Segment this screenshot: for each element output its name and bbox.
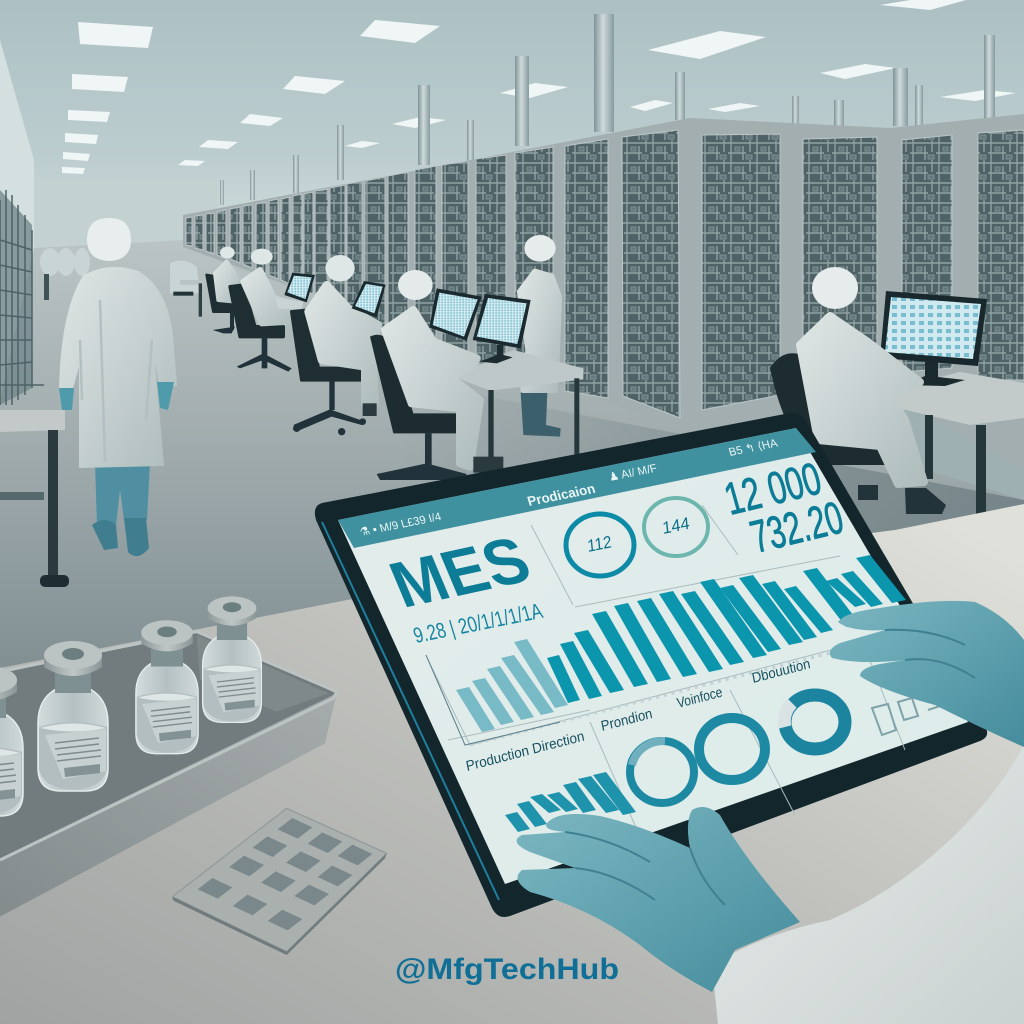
monitor and worker 5 <box>230 249 315 372</box>
desk with two monitors <box>429 288 583 473</box>
lab coat sleeve <box>712 745 1024 1024</box>
label: Dbouution: Dbouution <box>751 656 812 687</box>
header bar: B5 ↰ ⟨HA <box>727 438 780 459</box>
label: Production Direction: Production Direction <box>465 729 586 775</box>
header bar: ⚗ ▪ M/9 L£39 I/4 <box>358 511 443 539</box>
tablet body <box>315 413 987 917</box>
legs <box>95 462 150 525</box>
date text: 9.28 | 20/1/1/1/1A <box>410 598 546 648</box>
walking worker <box>59 218 176 556</box>
gloves <box>59 382 174 410</box>
floor shading right <box>400 380 1024 640</box>
right gloved hand <box>830 601 1024 747</box>
seated workers and desks, coordinates in crop space <box>170 235 583 480</box>
chair and worker 2 <box>370 270 503 480</box>
device icons panel <box>872 692 940 735</box>
back wall <box>33 180 218 250</box>
rack glass panels <box>186 130 1024 418</box>
chart tick row <box>470 648 850 745</box>
MES title: MES <box>380 523 541 621</box>
blister pack <box>172 808 387 955</box>
monitor and worker 4 <box>292 255 386 435</box>
watermark handle: @MfgTechHub <box>395 953 619 986</box>
header bar: ♟ AI/ M/F <box>607 463 659 484</box>
foreground table <box>0 504 1024 1024</box>
donut A <box>630 741 694 803</box>
label: Voinfoce: Voinfoce <box>676 685 724 712</box>
main bar chart <box>547 555 906 703</box>
monitor <box>880 291 987 366</box>
chair and worker 6 <box>207 247 237 333</box>
vial 3 <box>136 620 198 754</box>
header labels: Prodicaion <box>526 481 597 509</box>
vial 4 <box>203 596 261 722</box>
vial 1 <box>0 666 23 816</box>
lab coat <box>60 268 176 467</box>
coat shadow fold <box>80 300 152 462</box>
vial 2 <box>38 641 108 791</box>
gauge 112 <box>566 514 634 576</box>
rim <box>0 632 337 860</box>
metric 732.20: 732.20 <box>745 492 849 563</box>
standing worker <box>520 235 561 437</box>
gauge 144 <box>644 498 708 556</box>
floor <box>0 240 1024 700</box>
rack frame <box>183 114 1024 470</box>
far workers at the back <box>40 248 90 300</box>
header bar <box>338 428 816 548</box>
equipment racks wall <box>183 114 1024 470</box>
donut B <box>699 718 765 780</box>
finger creases <box>885 630 975 678</box>
metric 12 000: 12 000 <box>719 453 827 525</box>
hair cap <box>812 267 858 309</box>
gauge 112: 112 <box>586 531 612 556</box>
vials <box>0 596 261 816</box>
tray side <box>0 693 337 917</box>
gauge 144: 144 <box>661 513 691 538</box>
label: Prondion: Prondion <box>600 706 654 735</box>
donut C <box>784 695 845 749</box>
desk <box>855 372 1024 425</box>
screen <box>338 428 968 884</box>
chair <box>770 353 890 465</box>
hair cap <box>87 218 131 261</box>
pipes above racks <box>220 14 995 205</box>
inner wall <box>197 635 328 712</box>
far left workers <box>170 261 206 317</box>
left shelving <box>0 190 44 405</box>
small bar chart <box>505 772 636 832</box>
left desk <box>0 410 69 587</box>
light bar chart <box>456 639 568 732</box>
tablet <box>315 413 987 917</box>
right seated worker at monitor <box>770 267 1024 515</box>
stainless steel tray <box>0 632 337 917</box>
left wall <box>0 40 34 420</box>
blister cells <box>198 818 372 930</box>
chart axis <box>426 655 560 745</box>
tray inner <box>0 632 337 858</box>
shoes <box>92 518 149 556</box>
left gloved hand <box>517 807 800 992</box>
background: ceiling <box>0 0 1024 260</box>
finger creases <box>565 832 725 905</box>
body <box>800 316 924 484</box>
ceiling lights <box>62 0 1016 174</box>
panel dividers <box>428 505 905 860</box>
bezel edge highlight <box>322 522 499 900</box>
shoes <box>858 485 946 514</box>
